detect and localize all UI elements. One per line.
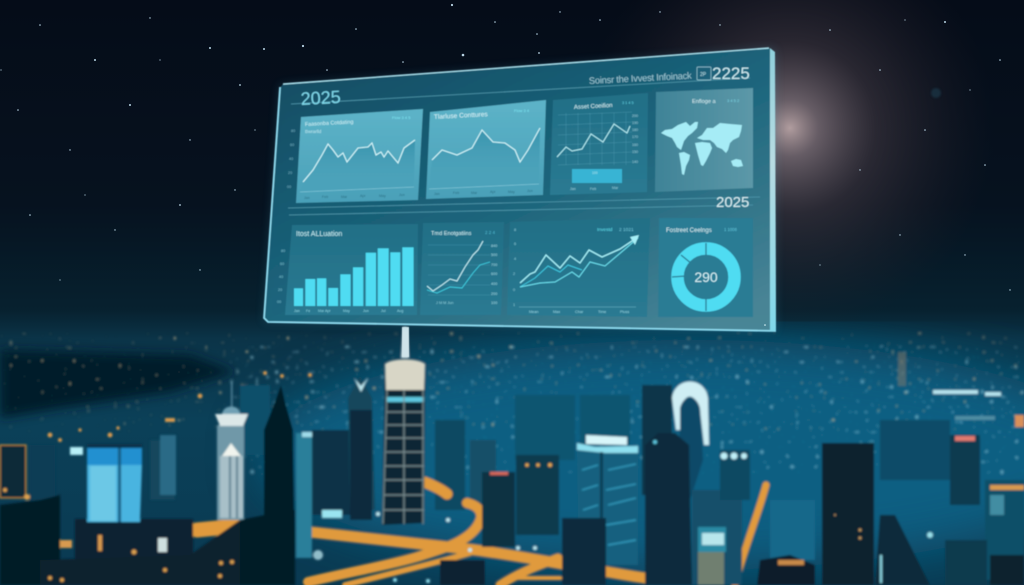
panel: bar chart: Aug [397, 309, 403, 313]
panel: growth line chart with arrow: 2 1021 [619, 227, 634, 233]
panel: asset line chart: 140 [632, 160, 638, 164]
panel: donut gauge: 290 [694, 269, 718, 285]
bars [294, 247, 414, 306]
left dark building block [0, 445, 295, 585]
panel: area line chart 1: Apr [360, 194, 366, 198]
panel: growth line chart with arrow: Investd [597, 227, 613, 233]
panel: bar chart: Jul [381, 309, 386, 313]
starfield [0, 4, 1011, 291]
panel: growth line chart with arrow: 4 [514, 257, 516, 261]
panel: trend line chart: 600 [491, 272, 497, 276]
panel: bar chart: Jan [294, 309, 300, 313]
panel: area line chart 1: Jun [399, 193, 405, 197]
panel: donut gauge [658, 218, 753, 317]
panel: asset line chart: 160 [632, 143, 638, 147]
panel: area line chart 2: Jun [527, 189, 533, 193]
highway network [197, 482, 766, 585]
year badge: 2225 [712, 64, 750, 83]
year badge: 2P [700, 72, 707, 78]
dark foreground spire [240, 385, 312, 585]
panel: area line chart 1: Flow 3 4 5 [392, 115, 411, 120]
header caption: Soinsr the Ivvest Infoinack [589, 70, 692, 86]
panel: area line chart 1: Jan [304, 196, 310, 200]
panel: trend line chart: 500 [491, 253, 497, 257]
panel: bar chart: Fe [306, 309, 310, 313]
panel: donut gauge: Fostreet Ceelngs [666, 228, 712, 234]
dashboard support mast [402, 327, 409, 357]
panel: area line chart 2: Mar [471, 191, 478, 195]
panel: growth line chart with arrow: 1 [513, 303, 515, 307]
panel: area line chart 2: May [508, 190, 515, 194]
panel: area line chart 1: 60 [290, 143, 294, 147]
panel: bar chart: 60 [280, 262, 284, 266]
panel: asset line chart: 100 [592, 171, 598, 175]
panel: area line chart 1: 80 [291, 129, 295, 133]
panel: asset line chart: Mar [612, 186, 619, 190]
panel: asset line chart [550, 93, 648, 195]
panel: area line chart 2: Flow 3 4 [514, 108, 530, 113]
panel: growth line chart with arrow: Max [553, 310, 560, 314]
background buildings [30, 385, 1024, 580]
white crown tower [215, 382, 248, 520]
panel: growth line chart with arrow: 2 [513, 272, 515, 276]
panel: area line chart 1: May [379, 194, 386, 198]
glowing blue tower [87, 444, 142, 522]
panel: trend line chart: 2 2 4 [485, 230, 496, 235]
arrowhead [630, 235, 639, 245]
panel: trend line chart [420, 222, 504, 315]
dark foreground right buildings [313, 435, 1024, 585]
panel: area line chart 1: Bwrarlld [305, 129, 322, 134]
outer panel glow [264, 48, 776, 331]
panel: area line chart 1: 00 [287, 185, 291, 189]
faint sky orb [931, 88, 941, 98]
panel: asset line chart: 170 [632, 135, 638, 139]
panel board [264, 48, 776, 331]
panel: bar chart [277, 224, 418, 315]
panel: growth line chart with arrow: Mean [529, 310, 538, 314]
panel: bar chart: Itost ALLuation [296, 231, 342, 238]
panel: growth line chart with arrow: 0 [513, 288, 515, 292]
panel: bar chart: May [343, 309, 350, 313]
panel: growth line chart with arrow: Pluss [620, 310, 629, 314]
central tall tower [382, 327, 425, 525]
panel: asset line chart: Feb [590, 187, 596, 191]
panel: world map [655, 88, 753, 192]
panel: trend line chart: J M M Jun [436, 301, 454, 305]
panel: bar chart: Mar Apr [318, 309, 331, 313]
year heading left: 2025 [300, 87, 341, 109]
distant city haze [0, 340, 1024, 570]
panel: asset line chart: 3 1 4 5 [622, 101, 634, 105]
panel: growth line chart with arrow: 6 [514, 242, 516, 246]
panel: trend line chart: Tmd Enotgatiins [431, 231, 472, 237]
panel: area line chart 1: Mar [341, 195, 348, 199]
panel: asset line chart: 190 [632, 121, 638, 125]
panel: area line chart 2: Feb [453, 191, 459, 195]
panel: area line chart 1: Faasonba Cotdating [305, 119, 354, 128]
panel: world map: Enfloge a [692, 99, 717, 105]
panel: trend line chart: 400 [491, 282, 497, 286]
panel: asset line chart: 180 [632, 128, 638, 132]
panel: growth line chart with arrow [507, 218, 650, 317]
panel: donut gauge: 1 1008 [724, 227, 737, 232]
panel: bar chart: 40 [279, 275, 283, 279]
panel: asset line chart: 150 [632, 150, 638, 154]
mid towers with lit roofs [482, 433, 750, 585]
panel: area line chart 1: 20 [288, 171, 292, 175]
panel: asset line chart: 200 [632, 114, 638, 118]
distant city lights [0, 332, 1024, 475]
city skyline [0, 327, 1024, 585]
foreground glowing windows [3, 488, 234, 582]
floating dashboard panel [264, 48, 776, 331]
donut ring [672, 243, 734, 311]
panel: area line chart 1: Feb [322, 195, 328, 199]
panel: trend line chart: 100 [491, 301, 497, 305]
panel: trend line chart: 200 [491, 292, 497, 296]
panel: area line chart 1: 40 [289, 157, 293, 161]
panel: trend line chart: 840 [491, 244, 497, 248]
panel: trend line chart: 700 [491, 263, 497, 267]
map continents [661, 122, 743, 175]
panel: asset line chart: Asset Coeifion [574, 103, 613, 111]
small corner indicator [764, 324, 766, 326]
panel: growth line chart with arrow: Char [575, 310, 584, 314]
panel: growth line chart with arrow: 8 [514, 228, 516, 232]
pointed tower behind central tower [348, 376, 375, 520]
panel: bar chart: 00 [277, 300, 281, 304]
panel: area line chart 2: Jan [434, 192, 440, 196]
panel: area line chart 1 [287, 109, 423, 203]
panel: bar chart: Jun [363, 309, 369, 313]
panel: asset line chart: Jan [570, 187, 576, 191]
panel: world map: 3 4 5 2 [727, 98, 740, 103]
panel: bar chart: 20 [278, 288, 282, 292]
panel: area line chart 2 [426, 100, 546, 199]
panel: area line chart 2: Tlarluse Conttures [434, 111, 489, 121]
arch tower [672, 382, 709, 500]
blue glass tower [577, 435, 638, 565]
year label lower right: 2025 [716, 194, 749, 211]
panel: area line chart 2: Apr [490, 190, 496, 194]
panel: growth line chart with arrow: Time [598, 310, 606, 314]
panel: bar chart: 80 [281, 249, 285, 253]
